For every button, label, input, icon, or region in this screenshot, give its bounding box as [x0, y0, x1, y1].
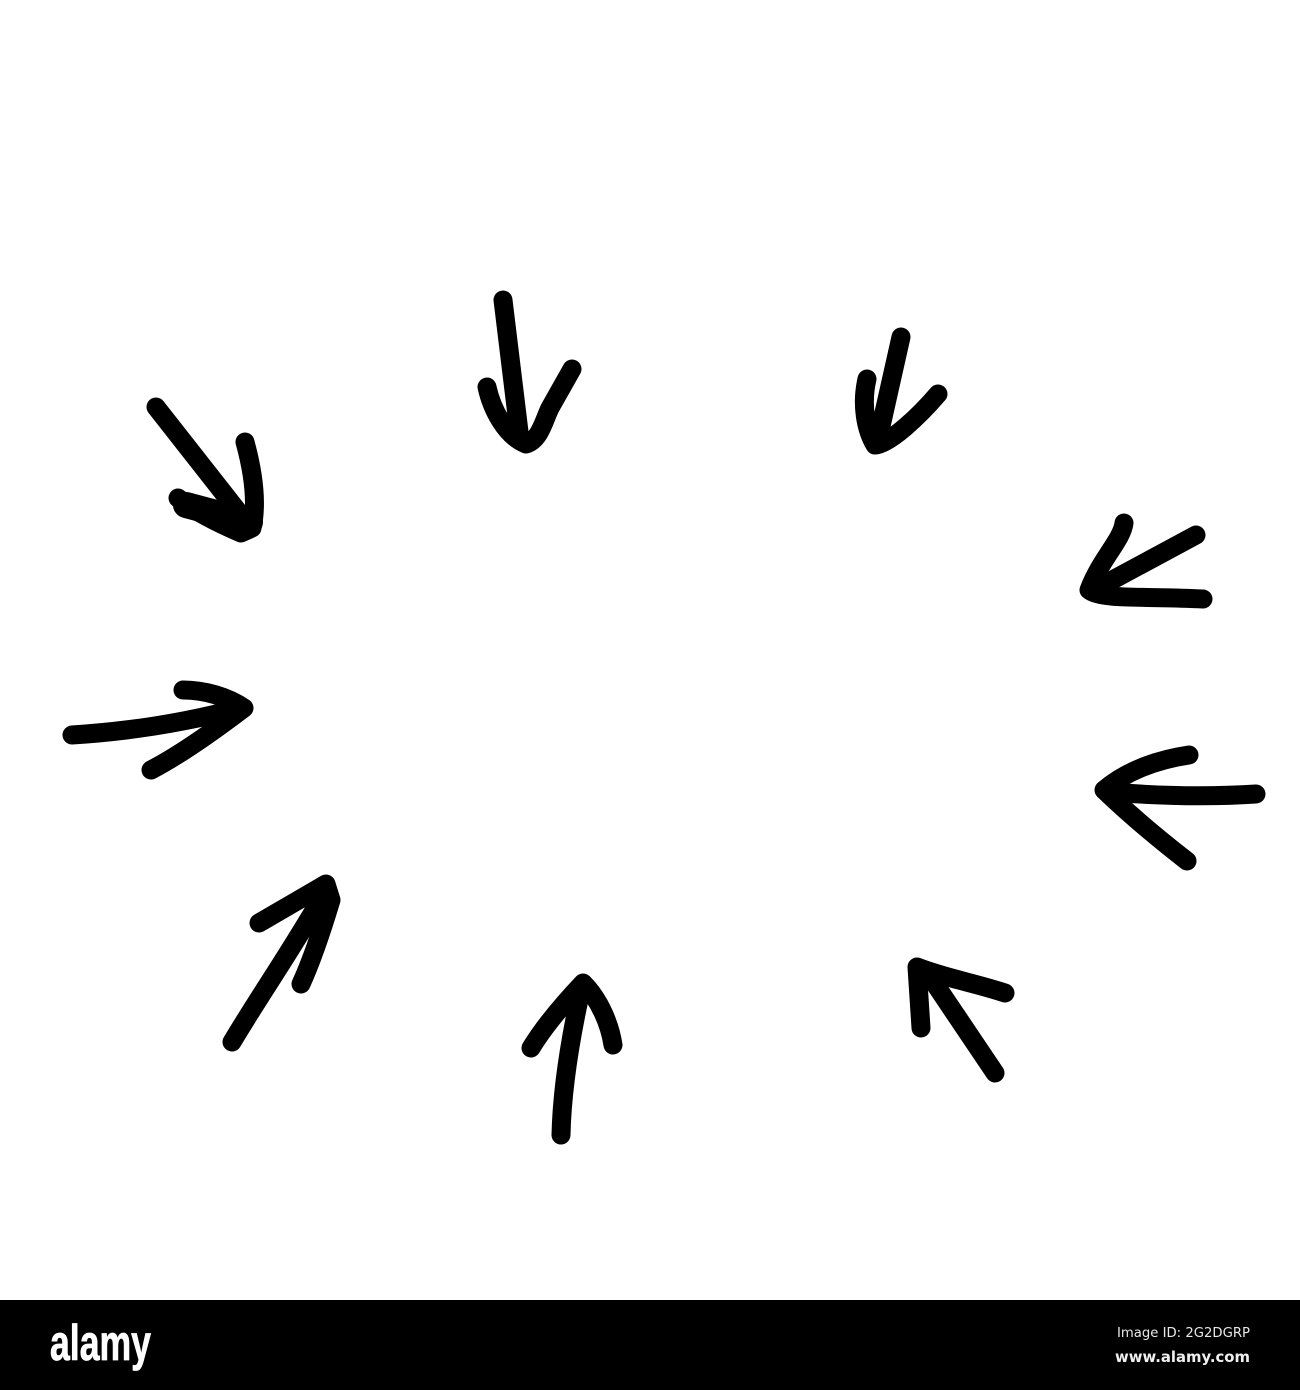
arrow: right lower pointing left [1104, 755, 1256, 861]
arrow: lower right pointing up-left [917, 967, 1005, 1073]
arrow: top left pointing down-right [156, 407, 254, 533]
arrow: lower left pointing up-right [232, 884, 331, 1042]
arrow: right upper pointing left [1089, 523, 1203, 599]
footer bar [0, 1300, 1300, 1390]
arrow: top center pointing down [487, 300, 572, 444]
footer logo: alamy [50, 1315, 151, 1371]
website url: www.alamy.com [1115, 1348, 1250, 1366]
arrow: top right pointing down-left [864, 337, 938, 445]
image id: Image ID: 2G2DGRP [1117, 1325, 1250, 1341]
arrow: bottom center pointing up [531, 983, 613, 1135]
arrow: left pointing right [72, 690, 244, 770]
